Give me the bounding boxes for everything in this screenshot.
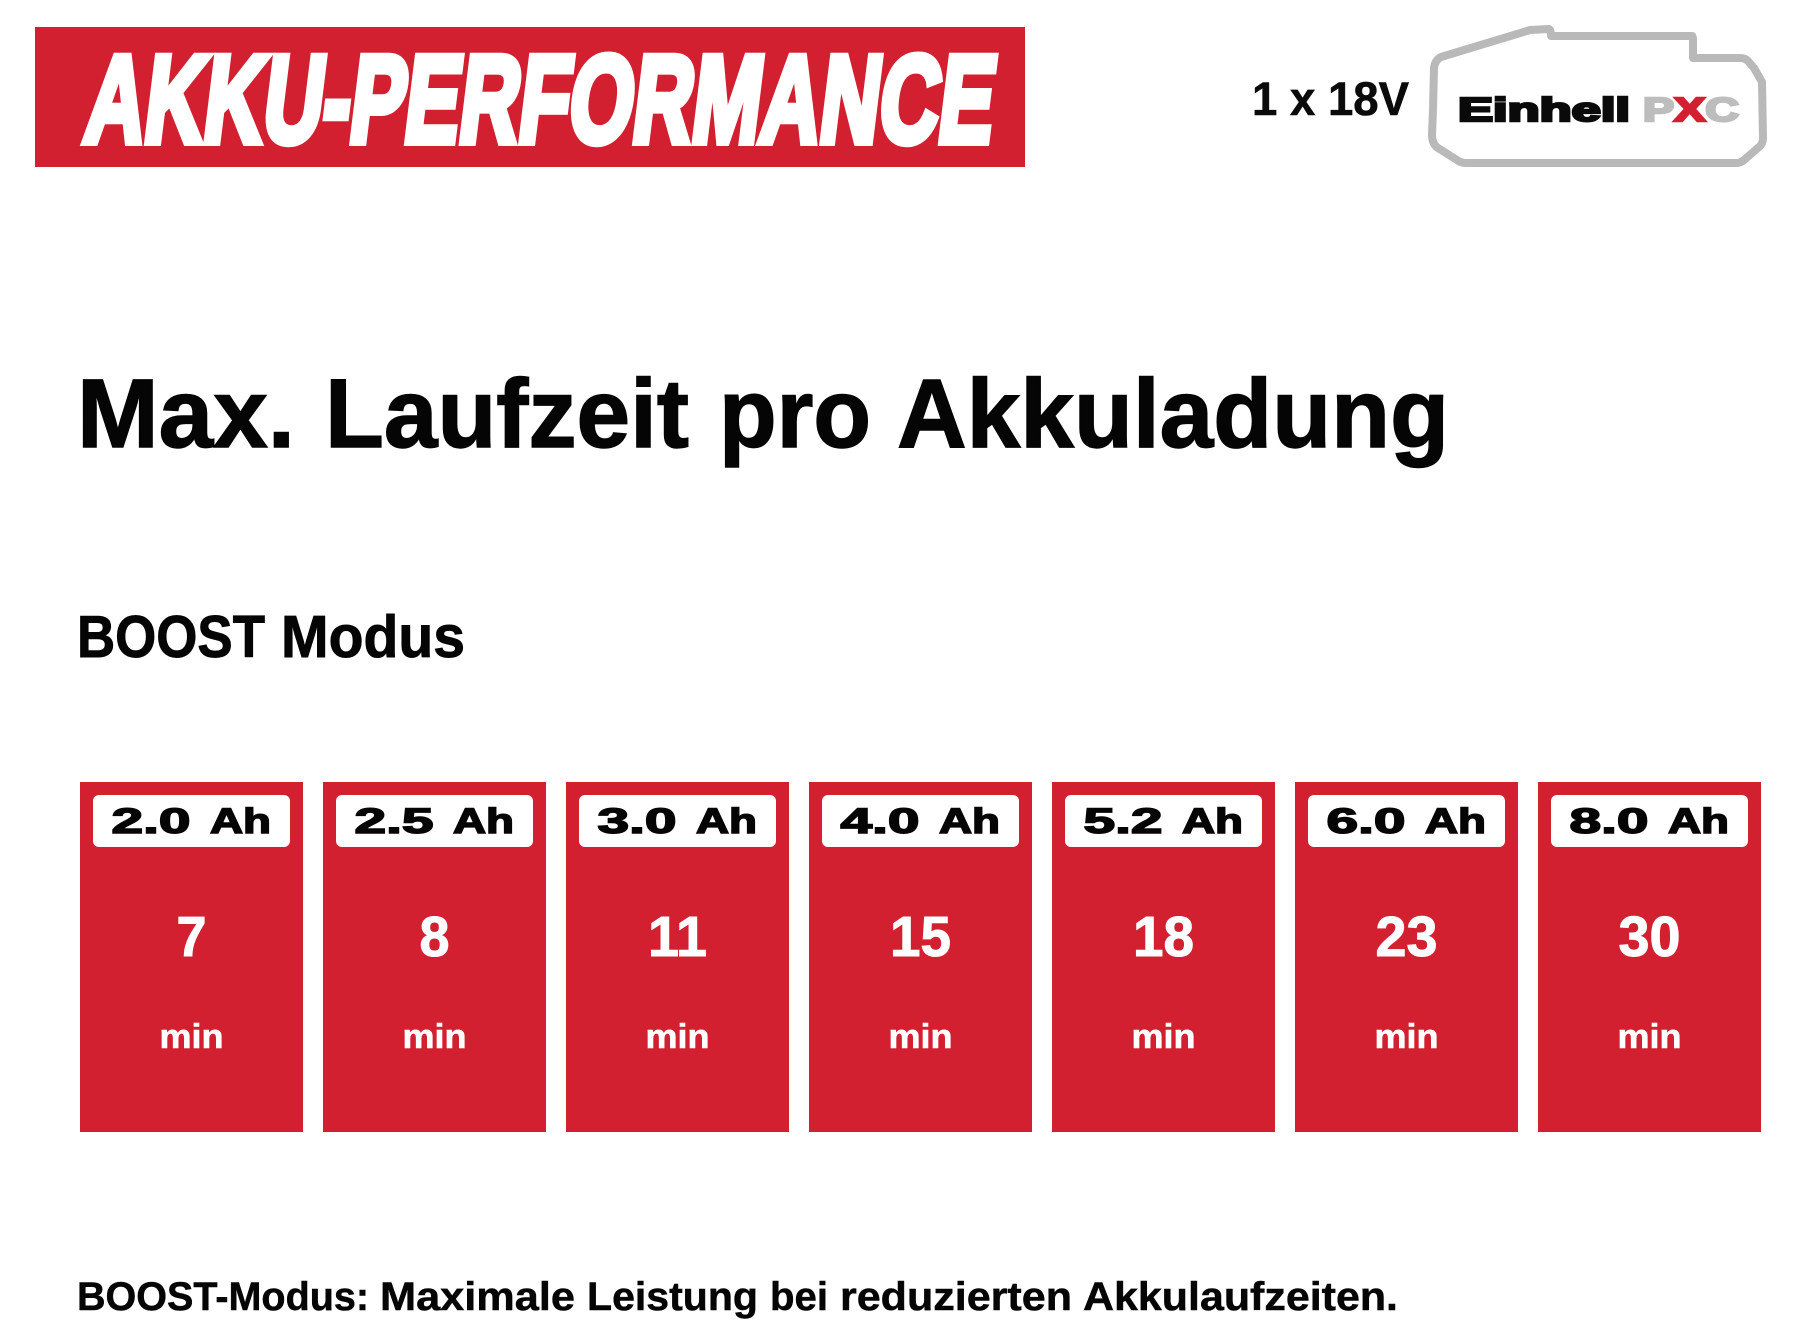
title: Laufzeit — [325, 359, 689, 468]
card: 3.0 Ah: 11 — [648, 905, 707, 969]
card: 8.0 Ah: Ah — [1668, 802, 1729, 841]
section heading — [77, 604, 465, 670]
card: 4.0 Ah: min — [888, 1018, 952, 1056]
section heading: BOOST — [77, 604, 265, 670]
card: 2.5 Ah: 2.5 — [354, 802, 434, 841]
card: 2.5 Ah: min — [402, 1018, 466, 1056]
logo: PXC: P X C — [1643, 91, 1739, 128]
card: 3.0 Ah — [566, 782, 789, 1132]
footnote: BOOST-Modus: — [77, 1275, 369, 1319]
card: 4.0 Ah: 15 — [890, 905, 951, 969]
card: 6.0 Ah: min — [1374, 1018, 1438, 1056]
card: 2.5 Ah — [323, 782, 546, 1132]
card: 8.0 Ah — [1538, 782, 1761, 1132]
card: 5.2 Ah: 18 — [1133, 905, 1194, 969]
card: 2.0 Ah: 7 — [176, 905, 206, 969]
card: 5.2 Ah: 5.2 — [1084, 802, 1162, 841]
title: pro — [719, 359, 871, 468]
footnote: Akkulaufzeiten. — [1083, 1275, 1398, 1319]
card: 2.5 Ah: Ah — [453, 802, 514, 841]
card: 2.0 Ah: min — [160, 1018, 224, 1056]
footnote: Maximale — [380, 1275, 575, 1319]
footnote: Leistung — [587, 1275, 758, 1319]
card: 3.0 Ah: Ah — [696, 802, 757, 841]
card: 6.0 Ah: Ah — [1425, 802, 1486, 841]
card row: runtimes — [80, 782, 1761, 1132]
card: 4.0 Ah: Ah — [939, 802, 1000, 841]
card: 6.0 Ah — [1295, 782, 1518, 1132]
footnote: bei — [770, 1275, 828, 1319]
card: 2.5 Ah: 8 — [420, 905, 450, 969]
card: 3.0 Ah: min — [646, 1018, 710, 1056]
card: 5.2 Ah: Ah — [1182, 802, 1243, 841]
card: 2.0 Ah — [80, 782, 303, 1132]
card: 8.0 Ah: 8.0 — [1570, 802, 1648, 841]
banner heading: AKKU-PERFORMANCE — [79, 30, 1004, 169]
card: 5.2 Ah — [1052, 782, 1275, 1132]
title: Akkuladung — [897, 359, 1449, 468]
card: 5.2 Ah: min — [1132, 1018, 1196, 1056]
footnote — [77, 1275, 1398, 1319]
banner: Akku-Performance — [35, 27, 1025, 169]
card: 6.0 Ah: 23 — [1376, 905, 1438, 969]
card: 8.0 Ah: min — [1618, 1018, 1682, 1056]
icon: battery with Einhell PXC logo — [1432, 29, 1763, 163]
card: 4.0 Ah: 4.0 — [840, 802, 920, 841]
title: Max. — [77, 359, 295, 468]
logo: Einhell: Einhell — [1458, 91, 1630, 128]
card: 8.0 Ah: 30 — [1618, 905, 1680, 969]
card: 2.0 Ah: 2.0 — [112, 802, 190, 841]
section heading: Modus — [281, 604, 465, 670]
card: 2.0 Ah: Ah — [210, 802, 271, 841]
footnote: reduzierten — [840, 1275, 1072, 1319]
voltage label: 1 x 18V — [1252, 72, 1410, 125]
card: 6.0 Ah: 6.0 — [1326, 802, 1406, 841]
card: 3.0 Ah: 3.0 — [598, 802, 676, 841]
title — [77, 359, 1449, 468]
card: 4.0 Ah — [809, 782, 1032, 1132]
